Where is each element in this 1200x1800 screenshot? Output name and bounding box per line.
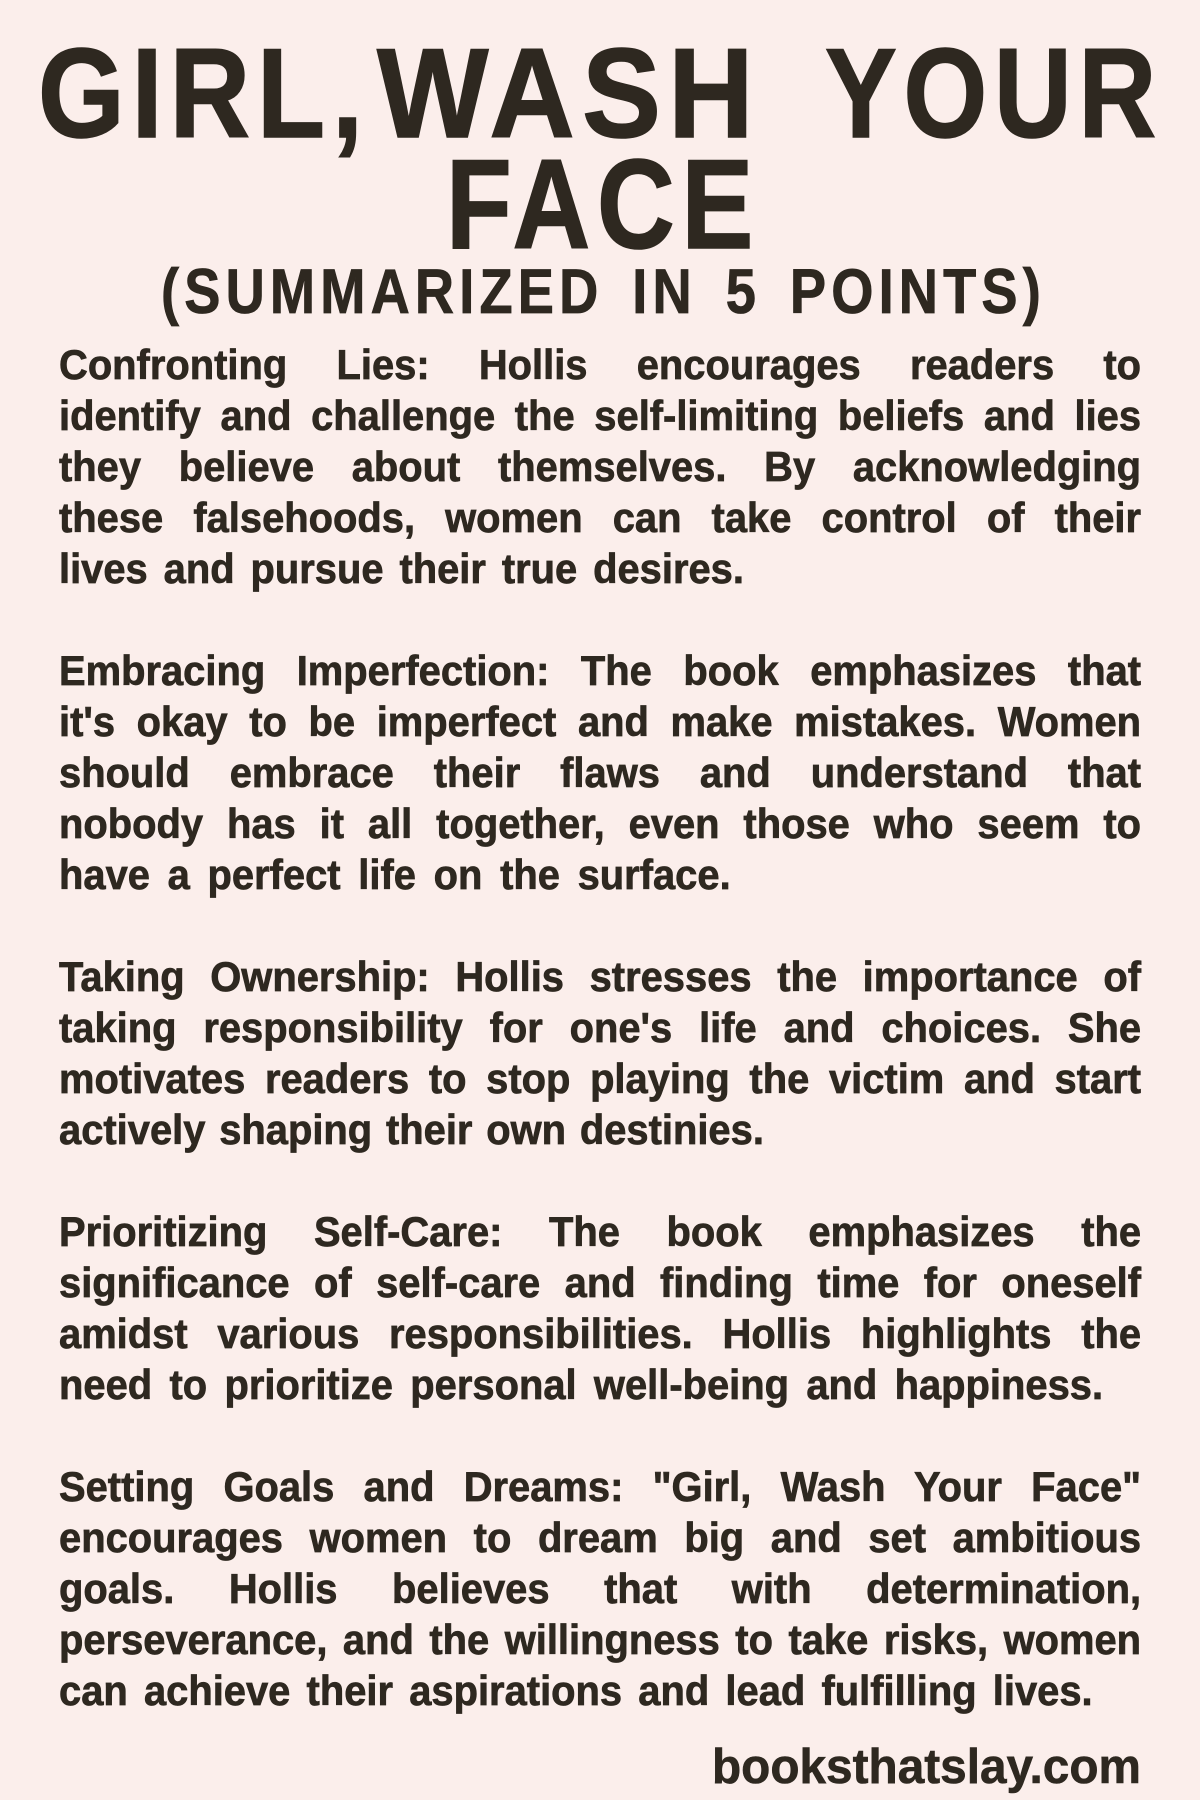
point 5: setting goals and dreams: goals. Hollis believes that with determination, [59, 1565, 1141, 1612]
point 1: confronting lies: identify and challenge the self-limiting beliefs and lies [59, 392, 1141, 439]
title line 2: FACE [446, 133, 760, 275]
point 5: setting goals and dreams: encourages women to dream big and set ambitious [59, 1514, 1141, 1561]
point 5: setting goals and dreams: perseverance, and the willingness to take risks, women [59, 1616, 1141, 1663]
point 3: taking ownership [59, 953, 1142, 1153]
point 1: confronting lies: these falsehoods, women can take control of their [59, 494, 1141, 541]
point 2: embracing imperfection [59, 647, 1141, 898]
point 4: prioritizing self-care: need to prioritize personal well-being and happiness. [59, 1361, 1103, 1408]
title and subtitle [38, 22, 1163, 327]
point 3: taking ownership: motivates readers to stop playing the victim and start [59, 1055, 1141, 1102]
point 2: embracing imperfection: Embracing Imperfection: The book emphasizes that [59, 647, 1141, 694]
point 5: setting goals and dreams: Setting Goals and Dreams: "Girl, Wash Your Face" [59, 1463, 1141, 1510]
subtitle: (SUMMARIZED IN 5 POINTS) [161, 257, 1046, 327]
point 3: taking ownership: taking responsibility for one's life and choices. She [59, 1004, 1141, 1051]
point 1: confronting lies: lives and pursue their true desires. [59, 545, 744, 592]
point 2: embracing imperfection: nobody has it all together, even those who seem to [59, 800, 1141, 847]
title line 1: GIRL, [38, 22, 370, 164]
point 3: taking ownership: actively shaping their own destinies. [59, 1106, 764, 1153]
point 5: setting goals and dreams [59, 1463, 1141, 1714]
title line 1: WASH [377, 22, 761, 164]
point 1: confronting lies: Confronting Lies: Hollis encourages readers to [59, 341, 1141, 388]
point 2: embracing imperfection: it's okay to be imperfect and make mistakes. Women [59, 698, 1141, 745]
point 4: prioritizing self-care: significance of self-care and finding time for oneself [59, 1259, 1141, 1306]
point 2: embracing imperfection: should embrace their flaws and understand that [59, 749, 1141, 796]
point 4: prioritizing self-care: Prioritizing Self-Care: The book emphasizes the [59, 1208, 1141, 1255]
point 4: prioritizing self-care: amidst various responsibilities. Hollis highlights the [59, 1310, 1141, 1357]
point 3: taking ownership: Taking Ownership: Hollis stresses the importance of [59, 953, 1141, 1000]
title line 1 [38, 22, 1163, 164]
point 1: confronting lies [59, 341, 1141, 592]
point 4: prioritizing self-care [59, 1208, 1142, 1408]
point 2: embracing imperfection: have a perfect life on the surface. [59, 851, 731, 898]
website footer: booksthatslay.com [712, 1740, 1141, 1794]
point 1: confronting lies: they believe about themselves. By acknowledging [59, 443, 1141, 490]
point 5: setting goals and dreams: can achieve their aspirations and lead fulfilling lives. [59, 1667, 1093, 1714]
